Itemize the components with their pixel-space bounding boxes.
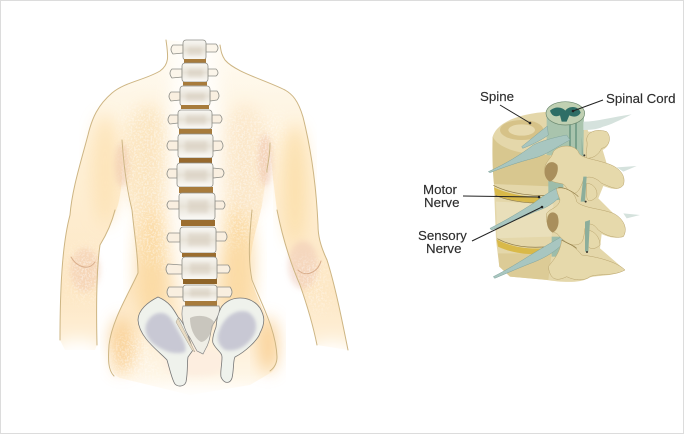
disc 9	[183, 279, 217, 284]
disc 10	[185, 301, 217, 306]
figure: human back with spine	[50, 20, 361, 414]
disc 1	[184, 59, 206, 63]
right ilium shading	[218, 311, 256, 350]
disc 3	[181, 105, 209, 109]
label: Motor Nerve	[423, 182, 540, 210]
spinal cord	[546, 102, 585, 257]
body contour lines	[60, 40, 348, 376]
spine: vertebrae column	[166, 40, 232, 306]
vertebra 4	[168, 110, 222, 129]
vertebral bodies	[492, 120, 557, 280]
vertebra 3	[169, 86, 219, 106]
nerves	[488, 114, 640, 278]
left ilium shading	[145, 313, 186, 353]
disc 8	[182, 253, 216, 257]
figure: spine cross-section with nerves	[488, 102, 640, 282]
disc 7	[181, 220, 215, 226]
pelvis	[138, 297, 264, 386]
label: Spine: Spine	[480, 89, 514, 104]
vertebra 7	[167, 193, 225, 220]
label: Sensory Nerve: Nerve	[426, 241, 461, 256]
sacrum shading	[190, 316, 214, 342]
disc 5	[179, 158, 212, 163]
label: Sensory Nerve	[418, 206, 543, 256]
bone silhouette	[493, 112, 625, 282]
disc 6	[179, 187, 213, 193]
label: Spinal Cord: Spinal Cord	[606, 91, 675, 106]
vertebra 9	[166, 257, 230, 280]
label: Motor Nerve: Motor	[423, 182, 458, 197]
bone detail and slits	[545, 137, 590, 253]
vertebra 2	[170, 63, 218, 82]
vertebra 1	[171, 40, 218, 60]
label: Sensory Nerve: Sensory	[418, 228, 467, 243]
coccyx strip	[176, 318, 195, 352]
vertebra 5	[167, 134, 223, 158]
left ilium	[138, 297, 193, 386]
right ilium	[213, 298, 264, 382]
disc 2	[183, 82, 207, 86]
label: Spinal Cord	[572, 91, 675, 112]
sacrum	[182, 306, 219, 354]
label: Motor Nerve: Nerve	[424, 195, 459, 210]
vertebra 6	[167, 163, 224, 187]
mottled skin texture	[70, 105, 330, 380]
posterior bone elements	[545, 130, 625, 280]
disc 4	[179, 129, 212, 134]
label: Spine	[480, 89, 531, 124]
vertebra 8	[167, 227, 227, 253]
vertebra 10	[167, 285, 232, 302]
torso and arms skin	[50, 20, 361, 414]
vertebra shading	[185, 47, 210, 297]
